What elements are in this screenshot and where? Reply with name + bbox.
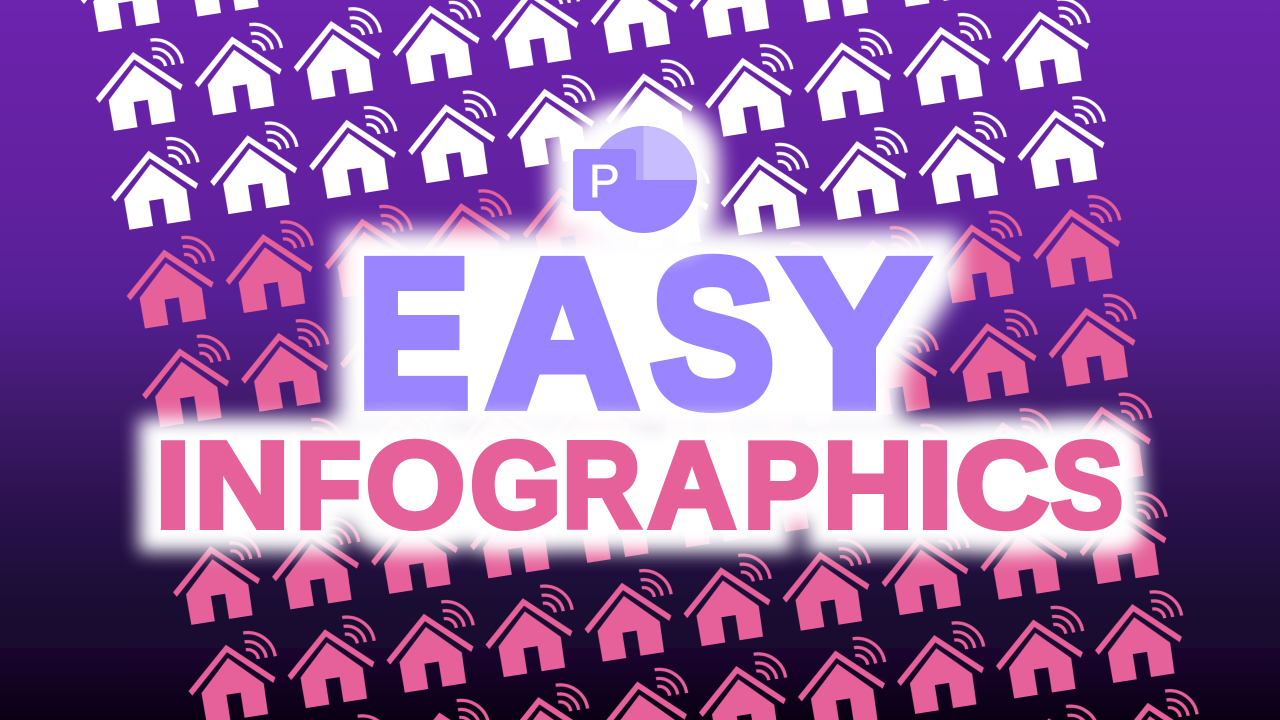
title: EASY: Y [782,218,926,450]
title: EASY: E [358,218,470,450]
pink wifi house icon grid [126,188,1199,720]
title: INFOGRAPHICS: S [1051,417,1123,553]
title: INFOGRAPHICS: R [562,417,641,553]
title: INFOGRAPHICS: G [470,417,561,553]
white wifi house icon grid [80,0,1106,242]
title: EASY: A [488,218,638,450]
title: INFOGRAPHICS: N [194,417,290,553]
icon: PowerPoint logo [573,126,697,233]
title: EASY: S [651,218,774,450]
title: INFOGRAPHICS: I [156,417,190,553]
title: INFOGRAPHICS: F [296,417,361,553]
title: INFOGRAPHICS: A [648,417,736,553]
title: INFOGRAPHICS: I [918,417,952,553]
icon: PowerPoint logo: P [589,155,620,207]
title: INFOGRAPHICS [156,417,1123,553]
title: INFOGRAPHICS: O [366,417,465,553]
title: EASY [358,218,926,450]
title: INFOGRAPHICS: P [743,417,820,553]
title: INFOGRAPHICS: C [955,417,1049,553]
title: INFOGRAPHICS: H [823,417,913,553]
